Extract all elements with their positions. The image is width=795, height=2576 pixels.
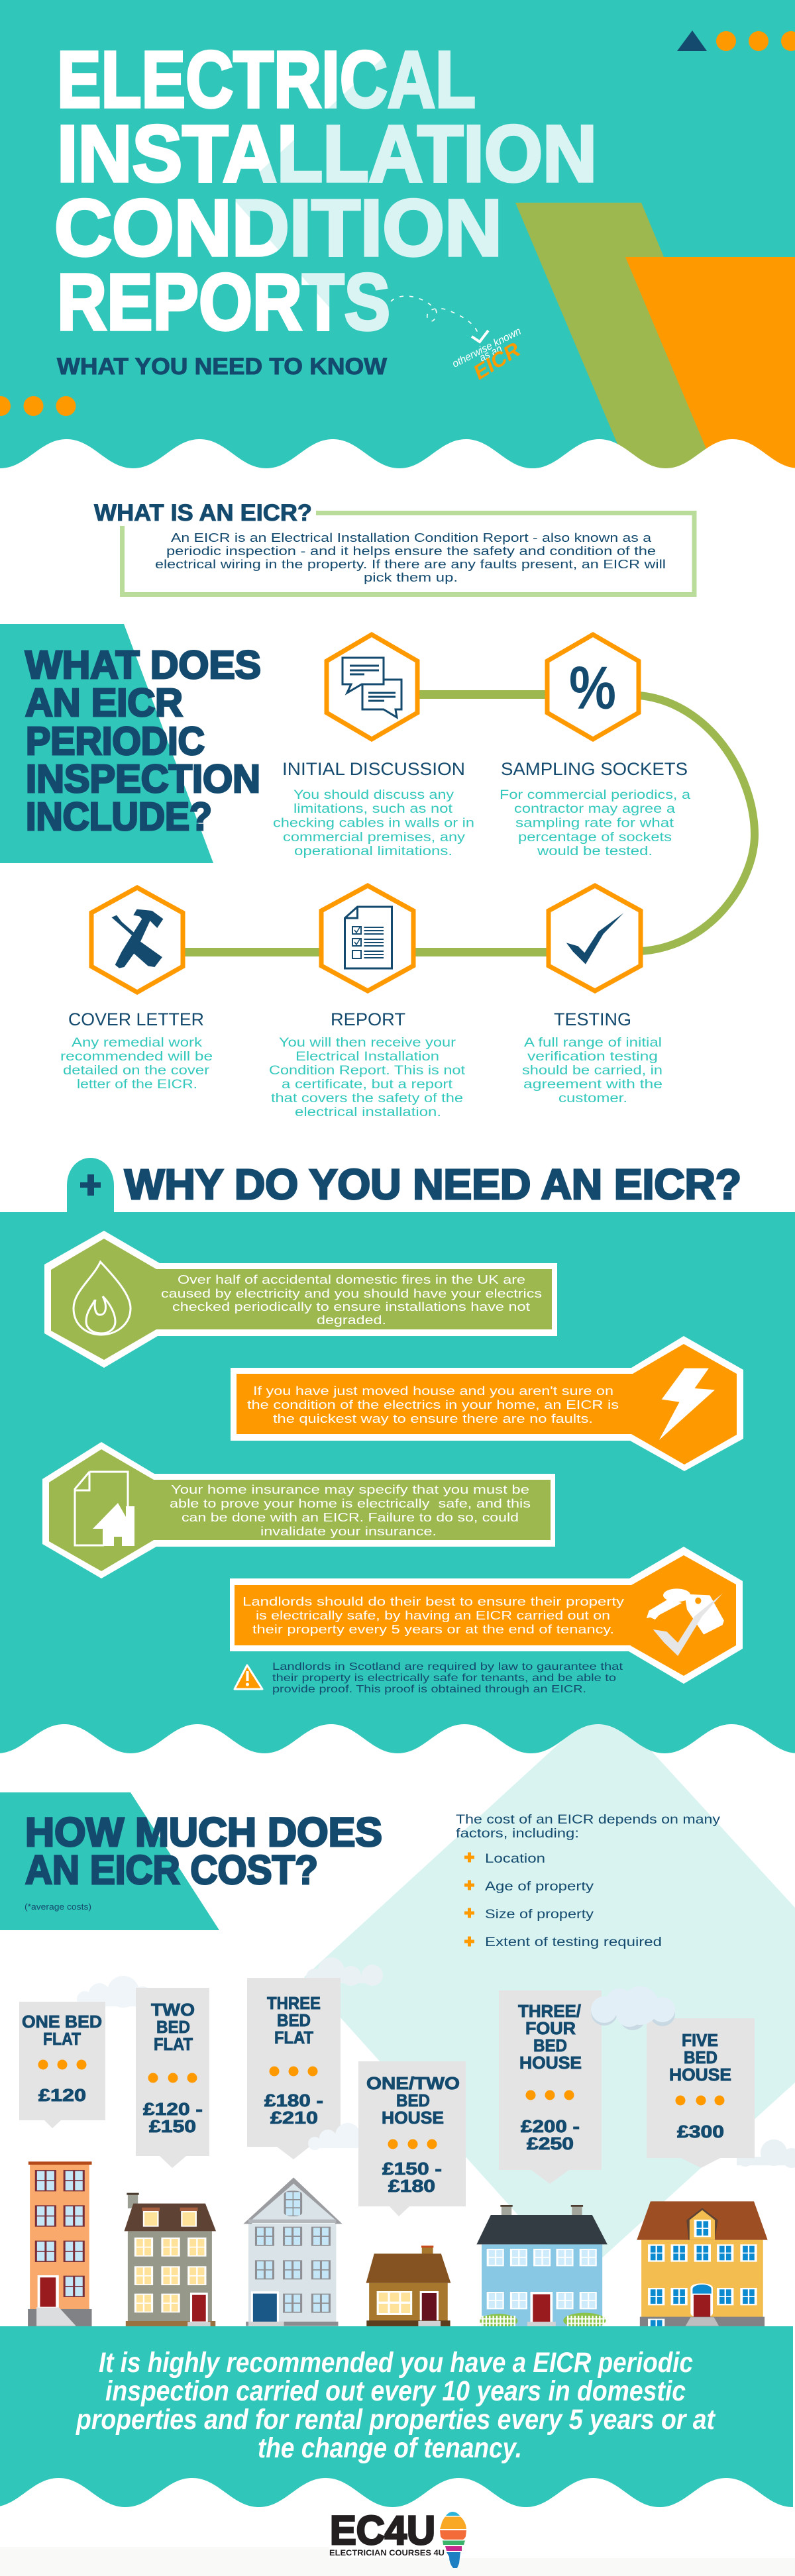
description: verification testing: [527, 1050, 658, 1064]
description: [522, 1036, 662, 1106]
text: intro: [456, 1813, 721, 1841]
price: five bed house: BED: [684, 2047, 717, 2067]
background: pale kite shape: [304, 1701, 795, 2281]
text: [242, 1595, 624, 1636]
price: five bed house: £300: [677, 2122, 724, 2141]
list: factors: Age of property: [485, 1880, 594, 1894]
price: one/two bed house: £180: [388, 2176, 435, 2196]
description: Any remedial work: [72, 1036, 203, 1050]
heading: AN EICR: [25, 681, 183, 725]
description: contractor may agree a: [514, 802, 676, 816]
text: degraded.: [317, 1314, 386, 1327]
cloud: right: [591, 1986, 675, 2030]
heading: INSPECTION: [26, 757, 260, 801]
note: (*average costs): [25, 1902, 91, 1912]
price: three/four bed house: £200 -: [521, 2116, 580, 2136]
subtitle: WHAT YOU NEED TO KNOW: [57, 354, 387, 380]
text: is electrically safe, by having an EICR carried out on: [256, 1609, 610, 1622]
price: one/two bed house: £150 -: [382, 2159, 442, 2179]
title: CONDITION: [54, 183, 502, 273]
description: checking cables in walls or in: [273, 816, 474, 831]
hexagon: [91, 888, 183, 992]
text: recommendation: the change of tenancy.: [258, 2432, 522, 2464]
callout: fires: [44, 1231, 557, 1368]
list: factors: Location: [485, 1852, 545, 1866]
description: [500, 788, 691, 858]
price: one/two bed house: ONE/TWO: [366, 2073, 460, 2093]
price: one/two bed house: [358, 2061, 466, 2216]
panel: what does an EICR include: [0, 624, 755, 1119]
icon: speech bubbles: [343, 658, 401, 717]
logo: EC4U: EC4U: [330, 2508, 435, 2553]
description: detailed on the cover: [63, 1064, 210, 1078]
arrow: dashed swoosh: [391, 296, 488, 342]
price: three/four bed house: BED: [533, 2035, 567, 2055]
price: two bed flat: BED: [156, 2017, 190, 2037]
icon: lightning bolt: [659, 1368, 715, 1440]
price: five bed house: [647, 2018, 755, 2168]
text: recommendation: [76, 2347, 716, 2464]
description: sampling rate for what: [515, 816, 674, 831]
price: three bed flat: £210: [270, 2108, 318, 2128]
teal band with wave: [0, 2326, 793, 2507]
background: bottom strip: [0, 2547, 795, 2576]
price: three/four bed house: HOUSE: [519, 2053, 582, 2073]
heading: [25, 643, 261, 839]
description: You will then receive your: [279, 1036, 456, 1050]
illustration: row of houses: [28, 2161, 768, 2328]
description: that covers the safety of the: [271, 1092, 463, 1106]
text: Landlords should do their best to ensure their property: [242, 1595, 624, 1608]
text: recommendation: inspection carried out every 10 years in domestic: [105, 2375, 686, 2407]
cloud: middle: [308, 2123, 360, 2150]
text: invalidate your insurance.: [260, 1525, 437, 1538]
description: commercial premises, any: [283, 831, 466, 845]
description: A full range of initial: [524, 1036, 662, 1050]
price: three bed flat: £180 -: [264, 2090, 323, 2110]
description: You should discuss any: [293, 788, 454, 802]
icon: document with house: [75, 1472, 144, 1546]
panel: footer recommendation: [0, 2326, 793, 2507]
hexagon: [549, 886, 641, 991]
price: five bed house: FIVE: [682, 2030, 718, 2050]
text: Scotland note: [272, 1661, 623, 1695]
price: three bed flat: THREE: [267, 1993, 321, 2013]
house 1: [28, 2161, 92, 2326]
text: Scotland note: their property is electrically safe for tenants, and be able to: [272, 1673, 616, 1684]
panel: header: [0, 0, 795, 478]
description: percentage of sockets: [518, 831, 672, 845]
description: electrical installation.: [295, 1106, 441, 1119]
price: three/four bed house: FOUR: [525, 2018, 576, 2038]
description: Electrical Installation: [295, 1050, 439, 1064]
price: three bed flat: FLAT: [274, 2028, 313, 2047]
price: three bed flat: [247, 1978, 341, 2159]
text: intro: factors, including:: [456, 1827, 579, 1841]
header wave: [0, 439, 795, 478]
price: one/two bed house: HOUSE: [382, 2108, 444, 2128]
list: factors: Size of property: [485, 1908, 594, 1922]
heading: [25, 1810, 382, 1892]
heading: WHAT IS AN EICR?: [94, 500, 312, 526]
list: factors: [464, 1852, 662, 1949]
price: one bed flat: [19, 2002, 105, 2128]
callout: moved house: [231, 1336, 743, 1471]
price: one bed flat: £120: [38, 2085, 86, 2105]
label: INITIAL DISCUSSION: [282, 759, 465, 779]
house 6: [637, 2201, 768, 2326]
icon: percent: %: [569, 654, 616, 722]
description: [269, 1036, 466, 1119]
hexagon: [321, 886, 413, 991]
tab with plus: [67, 1158, 114, 1213]
callout: otherwise known as an EICR: as an: [478, 343, 504, 364]
icon: warning triangle: [235, 1665, 262, 1689]
panel: how much does an EICR cost: [0, 1792, 795, 2328]
shape: orange slanted block: [625, 257, 795, 477]
description: For commercial periodics, a: [500, 788, 691, 802]
text: recommendation: It is highly recommended you have a EICR periodic: [99, 2347, 693, 2379]
panel: what is an EICR: [94, 500, 694, 595]
heading: WHY DO YOU NEED AN EICR?: [125, 1160, 741, 1208]
description: recommended will be: [60, 1050, 213, 1064]
icon: checklist document: [344, 907, 392, 968]
heading: AN EICR COST?: [25, 1847, 318, 1892]
price: two bed flat: [136, 1988, 209, 2168]
description: [60, 1036, 213, 1092]
step: cover letter: [60, 888, 213, 1092]
description: [273, 788, 474, 858]
text block: periodic inspection - and it helps ensure the safety and condition of the: [166, 544, 656, 558]
house 3: [243, 2177, 343, 2326]
logo: EC4U: [329, 2508, 466, 2568]
text: their property every 5 years or at the end of tenancy.: [252, 1623, 614, 1636]
label: TESTING: [554, 1009, 631, 1029]
description: Condition Report. This is not: [269, 1064, 466, 1078]
heading: HOW MUCH DOES: [25, 1810, 382, 1855]
step: testing: [522, 886, 662, 1106]
callout: landlords: [230, 1547, 743, 1684]
description: limitations, such as not: [293, 802, 453, 816]
step: sampling sockets: [500, 635, 691, 858]
label: REPORT: [331, 1009, 405, 1029]
icon: hammer and screwdriver: [111, 909, 163, 968]
step: initial discussion: [273, 635, 474, 858]
panel: why do you need an EICR: [0, 1158, 795, 1753]
hexagon: [327, 635, 417, 739]
label: COVER LETTER: [68, 1009, 204, 1029]
title: ELECTRICAL: [57, 34, 476, 125]
house 5: [476, 2205, 608, 2328]
house 2: [124, 2193, 216, 2326]
price: two bed flat: £150: [149, 2116, 196, 2136]
description: a certificate, but a report: [282, 1078, 453, 1092]
connector path: [183, 694, 755, 953]
text: Scotland note: Landlords in Scotland are required by law to gaurantee that: [272, 1661, 623, 1673]
text: [161, 1273, 542, 1327]
callout: otherwise known as an EICR: otherwise known: [450, 326, 523, 370]
text block: electrical wiring in the property. If there are any faults present, an EICR will: [155, 558, 666, 571]
callout: home insurance: [42, 1442, 555, 1578]
list: factors: Extent of testing required: [485, 1935, 662, 1949]
heading: PERIODIC: [26, 719, 205, 763]
title: REPORTS: [57, 257, 390, 347]
teal panel: [0, 1792, 219, 1930]
price: two bed flat: £120 -: [143, 2099, 203, 2119]
description: would be tested.: [537, 845, 653, 858]
text: Scotland note: provide proof. This proof is obtained through an EICR.: [272, 1684, 586, 1695]
price: two bed flat: TWO: [151, 2000, 195, 2020]
icon: keys and check: [647, 1588, 724, 1656]
price: three/four bed house: THREE/: [518, 2001, 581, 2021]
description: should be carried, in: [522, 1064, 662, 1078]
text: the quickest way to ensure there are no faults.: [273, 1412, 593, 1425]
text: able to prove your home is electrically safe, and this: [170, 1497, 531, 1510]
text: Your home insurance may specify that you must be: [171, 1483, 529, 1496]
text: checked periodically to ensure installations have not: [172, 1300, 530, 1314]
description: agreement with the: [523, 1078, 662, 1092]
callout: otherwise known as an EICR: EICR: [469, 338, 525, 384]
price: one/two bed house: BED: [396, 2090, 430, 2110]
heading: INCLUDE?: [26, 795, 212, 839]
text block: [155, 531, 666, 584]
text: [247, 1384, 619, 1425]
price: two bed flat: FLAT: [154, 2034, 193, 2054]
text: caused by electricity and you should have your electrics: [161, 1287, 542, 1300]
clouds behind boxes: [77, 1957, 795, 2168]
text: can be done with an EICR. Failure to do so, could: [182, 1511, 519, 1524]
box outline: [122, 513, 694, 595]
text: [170, 1483, 531, 1538]
text block: pick them up.: [364, 571, 458, 584]
price: one bed flat: ONE BED: [22, 2012, 102, 2032]
text: the condition of the electrics in your home, an EICR is: [247, 1398, 619, 1412]
text: Over half of accidental domestic fires in the UK are: [178, 1273, 525, 1286]
teal section with wave: [0, 1212, 795, 1753]
price: three/four bed house: £250: [527, 2134, 574, 2153]
price: three/four bed house: [499, 1990, 602, 2184]
price: one bed flat: FLAT: [43, 2029, 81, 2049]
description: letter of the EICR.: [77, 1078, 197, 1092]
icon: check mark: [566, 913, 623, 964]
label: SAMPLING SOCKETS: [501, 759, 688, 779]
icon: left dots: [0, 396, 76, 416]
text: If you have just moved house and you aren't sure on: [253, 1384, 613, 1398]
icon: navy triangle: [677, 30, 707, 51]
text: intro: The cost of an EICR depends on many: [456, 1813, 721, 1827]
description: operational limitations.: [294, 845, 452, 858]
title: INSTALLATION: [57, 109, 597, 199]
title: [54, 34, 597, 347]
price: five bed house: HOUSE: [669, 2065, 731, 2085]
teal panel: [0, 624, 213, 863]
icon: flame: [74, 1262, 131, 1335]
price: three bed flat: BED: [277, 2010, 311, 2030]
description: customer.: [558, 1092, 627, 1106]
text: recommendation: properties and for rental properties every 5 years or at: [76, 2404, 716, 2436]
step: report: [269, 886, 466, 1119]
icon: top right dots: [716, 31, 795, 51]
house 4: [366, 2245, 450, 2326]
heading: WHAT DOES: [25, 643, 261, 687]
text block: An EICR is an Electrical Installation Condition Report - also known as a: [171, 531, 652, 544]
shape: green slanted block: [515, 203, 755, 477]
hexagon: [547, 635, 639, 739]
logo: EC4U: ELECTRICIAN COURSES 4U: [329, 2550, 445, 2557]
icon: striped bulb: [440, 2512, 466, 2568]
